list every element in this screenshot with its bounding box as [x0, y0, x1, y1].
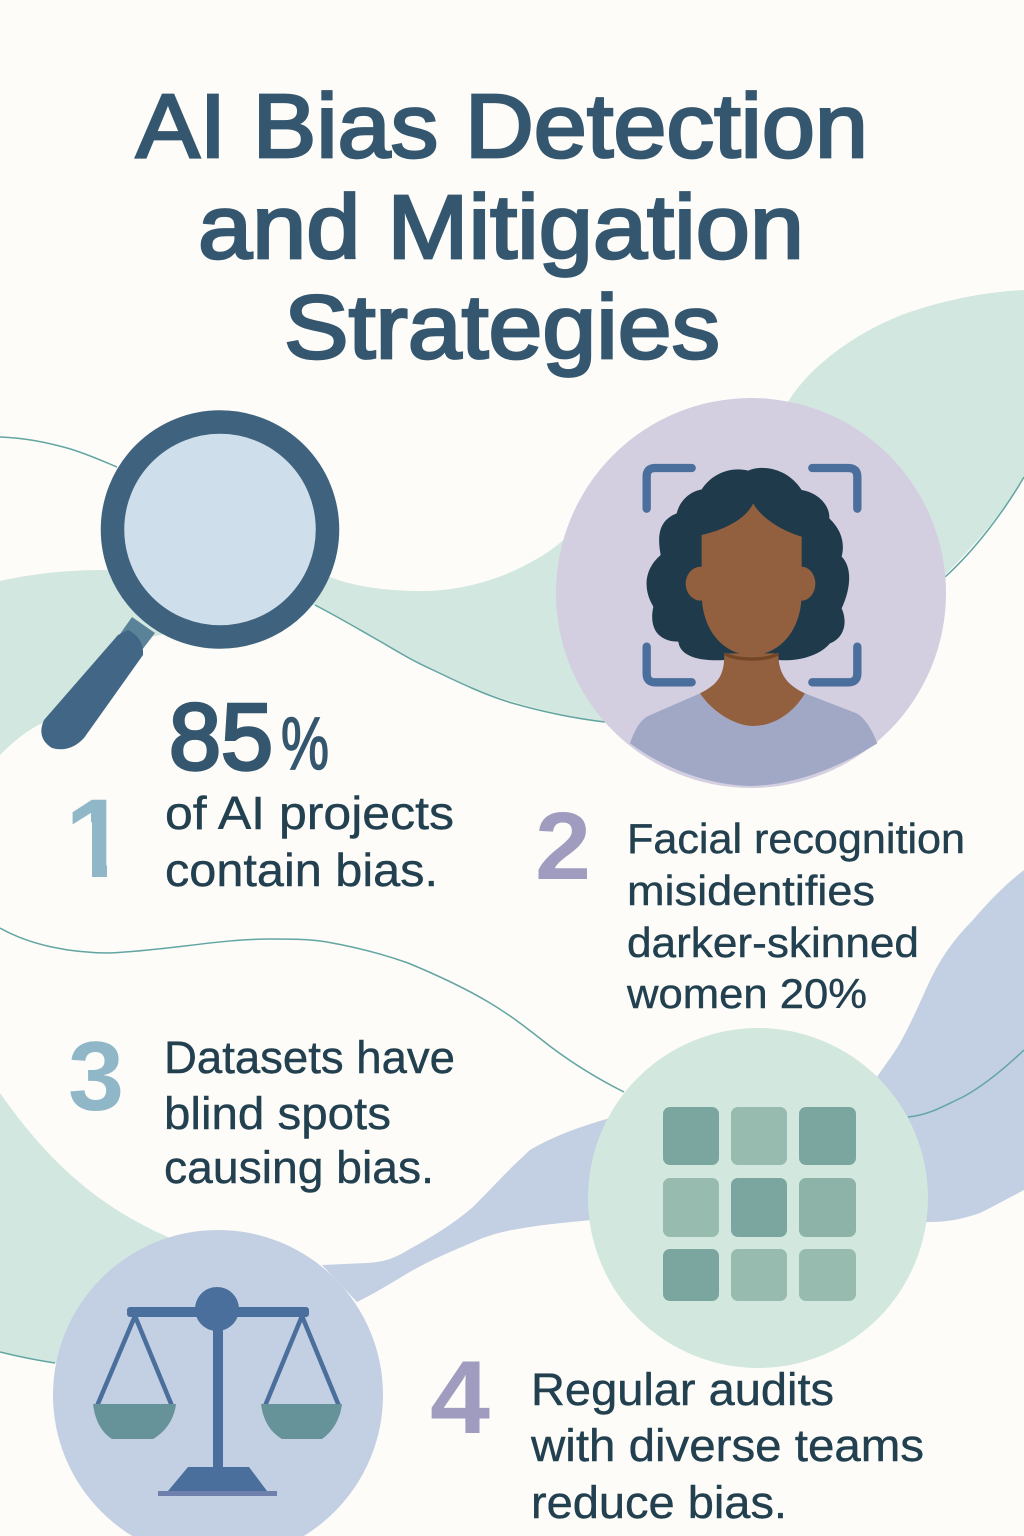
- face: [702, 503, 802, 655]
- number 2: 2: [535, 793, 591, 900]
- ears: [686, 567, 716, 601]
- shirt: [630, 693, 877, 786]
- text: item 2: darker-skinned: [627, 919, 919, 966]
- stat: 85%: %: [281, 702, 329, 785]
- number 3: 3: [68, 1021, 124, 1131]
- text: item 4: [530, 1364, 924, 1528]
- text: item 3: blind spots: [164, 1088, 391, 1139]
- title: AI Bias Detection: [136, 77, 868, 177]
- icon: data grid: [588, 1028, 928, 1368]
- neck: [700, 653, 805, 726]
- text: item 4: reduce bias.: [531, 1477, 787, 1528]
- title: and Mitigation: [198, 178, 804, 278]
- stat: 85%: [169, 684, 329, 789]
- title: [136, 77, 868, 378]
- text: item 2: misidentifies: [627, 867, 875, 914]
- stat: 85%: 85: [169, 684, 273, 789]
- text: item 3: [164, 1032, 455, 1193]
- text: item 2: [626, 815, 965, 1017]
- text: item 4: Regular audits: [531, 1364, 834, 1415]
- title: Strategies: [284, 278, 720, 378]
- icon: balance scale: [53, 1230, 383, 1536]
- number 1: 1: [65, 776, 127, 901]
- text: item 1: [165, 787, 454, 896]
- text: item 2: women 20%: [626, 970, 867, 1017]
- text: item 3: Datasets have: [164, 1032, 455, 1083]
- number 4: 4: [430, 1340, 490, 1456]
- text: item 4: with diverse teams: [530, 1420, 924, 1471]
- text: item 1: contain bias.: [165, 844, 438, 896]
- icon: magnifying glass: [41, 422, 327, 749]
- text: item 1: of AI projects: [165, 787, 454, 839]
- frame corners: [647, 468, 857, 682]
- icon: face recognition portrait: [556, 398, 946, 788]
- decorative lines: [0, 437, 1024, 1363]
- text: item 3: causing bias.: [164, 1142, 434, 1193]
- text: item 2: Facial recognition: [627, 815, 965, 862]
- hair: [647, 468, 849, 660]
